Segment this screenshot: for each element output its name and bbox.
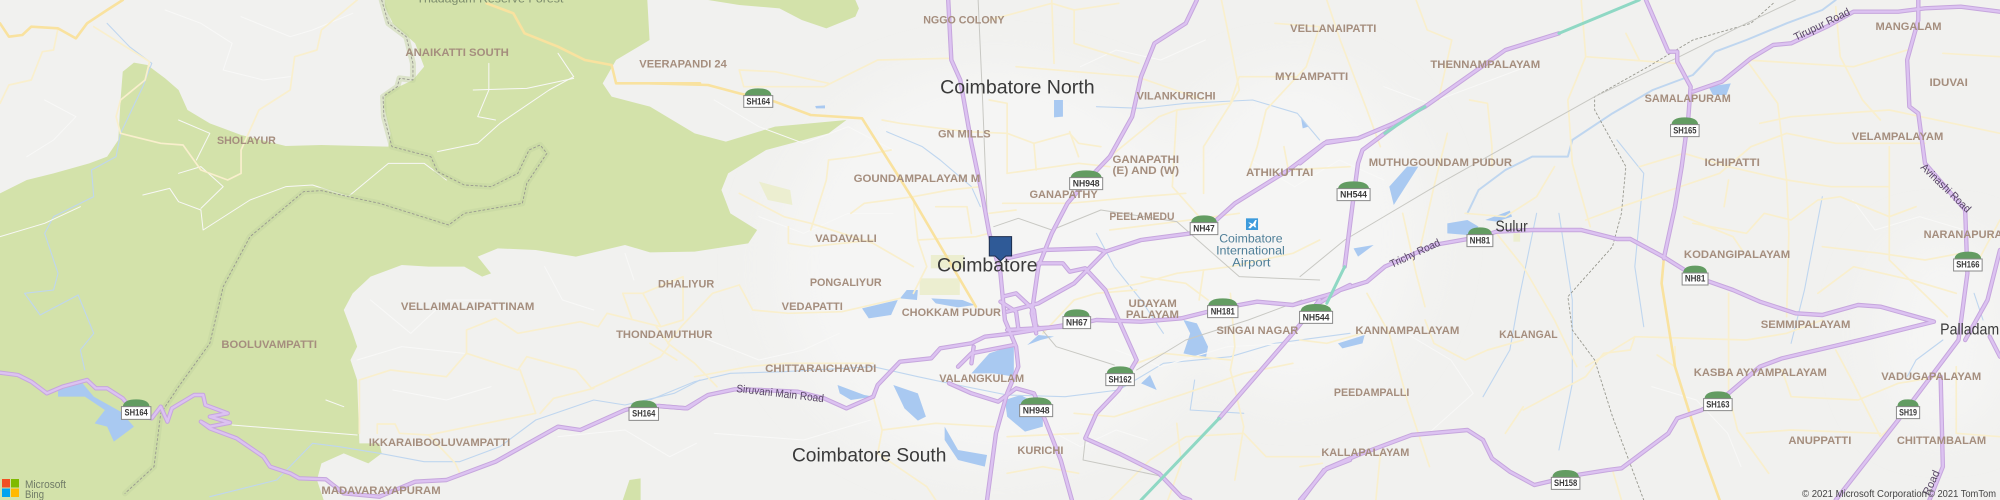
shield: NH47: NH47 xyxy=(1193,224,1215,234)
shield: SH162: SH162 xyxy=(1108,375,1132,385)
shield: SH164: SH164 xyxy=(632,409,656,419)
label: Goundampalayam M: GOUNDAMPALAYAM M xyxy=(854,172,980,185)
label: Ganapathi (E) and (W): GANAPATHI xyxy=(1113,153,1179,166)
urban lighter area xyxy=(781,67,2000,467)
label: Ikkaraibooluvampatti: IKKARAIBOOLUVAMPATTI xyxy=(369,436,510,449)
label: Velampalayam: VELAMPALAYAM xyxy=(1852,130,1943,143)
shield: NH47 xyxy=(1190,215,1218,235)
shield: SH19 xyxy=(1896,399,1920,419)
place labels east xyxy=(1321,20,2000,459)
label: Coimbatore South: Coimbatore South xyxy=(792,444,946,466)
teal expressway segments xyxy=(1141,0,1639,500)
label: Athikuttai: ATHIKUTTAI xyxy=(1246,166,1313,179)
label: Coimbatore International Airport: Coimbatore xyxy=(1219,233,1283,245)
shield: NH67 xyxy=(1063,309,1091,329)
place labels centre xyxy=(765,14,1376,466)
shield: SH163 xyxy=(1704,391,1732,411)
label: Udayam Palayam: UDAYAM xyxy=(1129,297,1177,310)
shield: SH164 xyxy=(629,400,658,420)
label: Vellaimalaipattinam: VELLAIMALAIPATTINAM xyxy=(401,300,534,313)
copyright attribution: © 2021 Microsoft Corporation xyxy=(1802,488,1927,500)
shield: NH948: NH948 xyxy=(1073,179,1100,189)
label: Chokkam Pudur: CHOKKAM PUDUR xyxy=(902,306,1001,319)
label: Ganapathy: GANAPATHY xyxy=(1029,188,1098,201)
road name: Road fragment: Road xyxy=(1921,469,1943,497)
label: Coimbatore International Airport xyxy=(1216,233,1285,269)
label: Udayam Palayam xyxy=(1126,297,1179,321)
label: Vilankurichi: VILANKURICHI xyxy=(1137,90,1216,102)
label: Coimbatore North: Coimbatore North xyxy=(940,76,1095,98)
shield: NH81 xyxy=(1682,266,1708,285)
label: Sulur: Sulur xyxy=(1496,217,1528,235)
road name: Avinashi Road: Avinashi Road xyxy=(1918,162,1973,215)
label: Kodangipalayam: KODANGIPALAYAM xyxy=(1684,248,1790,261)
label: Sholayur: SHOLAYUR xyxy=(217,134,276,147)
label: Mylampatti: MYLAMPATTI xyxy=(1275,70,1348,83)
road name: Trichy Road: Trichy Road xyxy=(1388,237,1442,271)
campus patches xyxy=(759,182,1520,295)
label: Mangalam: MANGALAM xyxy=(1875,20,1942,33)
label: Nggo Colony: NGGO COLONY xyxy=(923,14,1005,26)
shield: SH166: SH166 xyxy=(1956,260,1979,270)
label: Udayam Palayam: PALAYAM xyxy=(1126,308,1179,321)
label: Veerapandi 24: VEERAPANDI 24 xyxy=(639,58,727,70)
shield: SH164: SH164 xyxy=(125,408,148,418)
label: Peedampalli: PEEDAMPALLI xyxy=(1334,386,1409,399)
shield: NH948 xyxy=(1070,170,1103,190)
location pin marker xyxy=(989,237,1012,261)
label: Iduvai: IDUVAI xyxy=(1929,76,1968,89)
label: Anaikatti South: ANAIKATTI SOUTH xyxy=(405,46,509,59)
shield: NH544 xyxy=(1337,181,1370,201)
road name: Siruvani Main Road: Siruvani Main Road xyxy=(736,383,824,405)
shield: SH164 xyxy=(121,399,151,419)
label: Ganapathi (E) and (W) xyxy=(1113,153,1179,177)
shield: SH158 xyxy=(1551,470,1580,489)
shield: NH181 xyxy=(1208,298,1238,318)
highway shields centre xyxy=(744,88,1333,417)
shield: SH162 xyxy=(1106,366,1134,386)
label: Vedapatti: VEDAPATTI xyxy=(782,300,843,313)
road name: Tirupur Road: Tirupur Road xyxy=(1792,6,1852,44)
Microsoft Bing logo: Microsoft xyxy=(25,479,66,491)
label: Kasba Ayyampalayam: KASBA AYYAMPALAYAM xyxy=(1694,366,1827,379)
label: Kannampalayam: KANNAMPALAYAM xyxy=(1355,324,1459,337)
shield: NH544 xyxy=(1300,304,1333,323)
label: Valangkulam: VALANGKULAM xyxy=(939,372,1024,385)
label: Semmipalayam: SEMMIPALAYAM xyxy=(1761,318,1850,331)
water bodies xyxy=(58,83,1731,467)
label: Ganapathi (E) and (W): (E) AND (W) xyxy=(1113,164,1179,177)
label: Pongaliyur: PONGALIYUR xyxy=(810,276,882,289)
label: Madavarayapuram: MADAVARAYAPURAM xyxy=(321,484,441,497)
label: Singai Nagar: SINGAI NAGAR xyxy=(1217,324,1299,337)
label: GN Mills: GN MILLS xyxy=(938,128,991,140)
label: Vellanaipatti: VELLANAIPATTI xyxy=(1290,22,1376,35)
label: Ichipatti: ICHIPATTI xyxy=(1704,156,1760,169)
Microsoft Bing logo xyxy=(2,479,66,500)
shield: NH67: NH67 xyxy=(1066,318,1088,328)
shield: NH81: NH81 xyxy=(1685,274,1705,284)
label: Dhaliyur: DHALIYUR xyxy=(658,278,715,290)
label: Chittaraichavadi: CHITTARAICHAVADI xyxy=(765,362,876,375)
shield: NH948 xyxy=(1020,397,1053,417)
label: Coimbatore International Airport: International xyxy=(1216,245,1285,257)
shield: NH81: NH81 xyxy=(1470,236,1490,246)
shield: NH181: NH181 xyxy=(1211,307,1235,317)
label: Booluvampatti: BOOLUVAMPATTI xyxy=(221,338,317,351)
shield: NH81 xyxy=(1467,227,1493,247)
shield: NH544: NH544 xyxy=(1303,313,1330,323)
label: Thennampalayam: THENNAMPALAYAM xyxy=(1430,58,1540,71)
place labels west xyxy=(217,0,727,497)
label: Kurichi: KURICHI xyxy=(1017,444,1063,457)
label: Muthugoundam Pudur: MUTHUGOUNDAM PUDUR xyxy=(1369,156,1513,169)
forest areas xyxy=(0,0,859,500)
shield: SH165 xyxy=(1671,117,1699,137)
shield: SH164: SH164 xyxy=(746,97,771,107)
label: Peelamedu: PEELAMEDU xyxy=(1109,210,1175,223)
shield: SH166 xyxy=(1954,252,1982,271)
icon: airport xyxy=(1246,218,1258,230)
label: Anuppatti: ANUPPATTI xyxy=(1788,434,1851,447)
shield: SH19: SH19 xyxy=(1899,408,1917,418)
label: Samalapuram: SAMALAPURAM xyxy=(1645,92,1731,105)
label: Coimbatore: Coimbatore xyxy=(937,254,1038,276)
shield: SH164 xyxy=(744,88,773,107)
label: Thondamuthur: THONDAMUTHUR xyxy=(616,328,713,341)
railway lines xyxy=(978,0,1796,477)
label: Kalangal: KALANGAL xyxy=(1499,328,1558,341)
shield: SH165: SH165 xyxy=(1673,126,1696,136)
label: Vadavalli: VADAVALLI xyxy=(815,232,877,245)
label: Coimbatore International Airport: Airport xyxy=(1232,257,1271,269)
shield: NH544: NH544 xyxy=(1340,190,1368,200)
shield: SH163: SH163 xyxy=(1706,400,1729,410)
shield: SH158: SH158 xyxy=(1554,478,1577,489)
label: Kallapalayam: KALLAPALAYAM xyxy=(1321,446,1409,459)
highway shields east xyxy=(1337,117,1982,489)
highway shields west xyxy=(121,399,658,420)
shield: NH948: NH948 xyxy=(1023,406,1050,416)
